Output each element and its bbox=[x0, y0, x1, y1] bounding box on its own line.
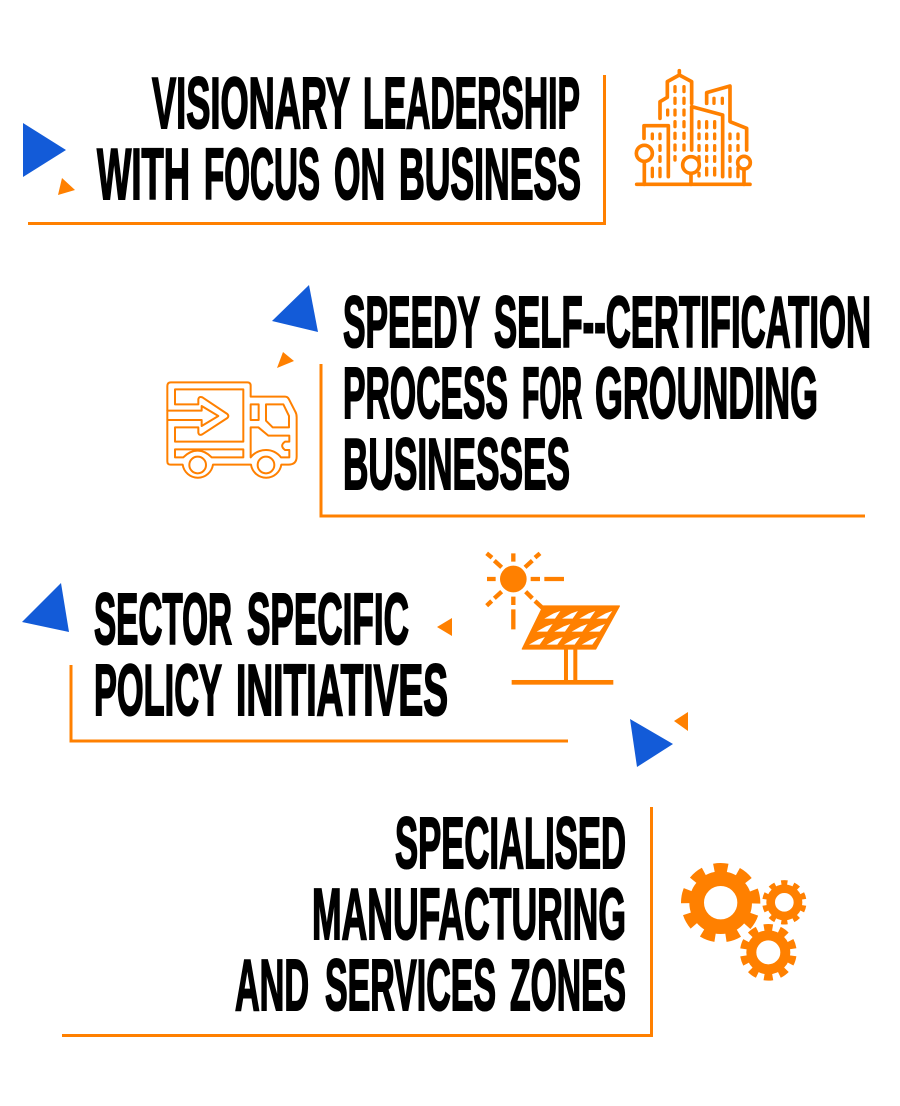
icon: delivery truck bbox=[167, 382, 297, 478]
heading: SPECIFIC bbox=[247, 579, 409, 660]
heading: ON bbox=[334, 134, 385, 215]
heading bbox=[343, 282, 871, 505]
heading: FOR bbox=[522, 353, 582, 434]
heading bbox=[94, 579, 448, 731]
icon: gears bbox=[680, 862, 807, 981]
panel: visionary leadership: BUSINESS bbox=[399, 134, 581, 215]
orange triangle bbox=[674, 712, 688, 731]
icon: solar panel and sun bbox=[487, 553, 619, 685]
heading: SPEEDY bbox=[343, 282, 480, 363]
panel: visionary leadership: LEADERSHIP bbox=[363, 63, 580, 144]
heading: SERVICES bbox=[325, 945, 496, 1026]
panel: sector specific policy bbox=[22, 553, 619, 741]
heading bbox=[235, 803, 626, 1026]
heading: SECTOR bbox=[94, 579, 232, 660]
icon: city buildings bbox=[636, 71, 750, 184]
heading: FOCUS bbox=[204, 134, 320, 215]
panel frame bbox=[71, 665, 568, 741]
heading: INITIATIVES bbox=[236, 650, 448, 731]
panel: speedy self-certification bbox=[167, 282, 871, 516]
panel: visionary leadership bbox=[23, 63, 750, 224]
panel: specialised manufacturing: SPECIALISED bbox=[395, 803, 626, 884]
blue triangle bbox=[22, 583, 69, 632]
orange triangle bbox=[58, 178, 75, 195]
heading: PROCESS bbox=[343, 353, 508, 434]
panel: specialised manufacturing: ZONES bbox=[510, 945, 626, 1026]
heading: POLICY bbox=[94, 650, 222, 731]
blue triangle bbox=[630, 719, 673, 767]
heading bbox=[97, 63, 581, 215]
heading: BUSINESSES bbox=[343, 424, 570, 505]
blue triangle bbox=[23, 123, 66, 177]
heading: VISIONARY bbox=[152, 63, 350, 144]
heading: AND bbox=[235, 945, 309, 1026]
orange triangle bbox=[277, 352, 294, 368]
orange triangle bbox=[437, 618, 452, 636]
heading: WITH bbox=[97, 134, 190, 215]
panel frame bbox=[28, 75, 604, 224]
panel frame bbox=[62, 807, 652, 1036]
panel: specialised manufacturing bbox=[62, 712, 807, 1036]
panel frame bbox=[321, 364, 865, 516]
blue triangle bbox=[272, 285, 318, 332]
